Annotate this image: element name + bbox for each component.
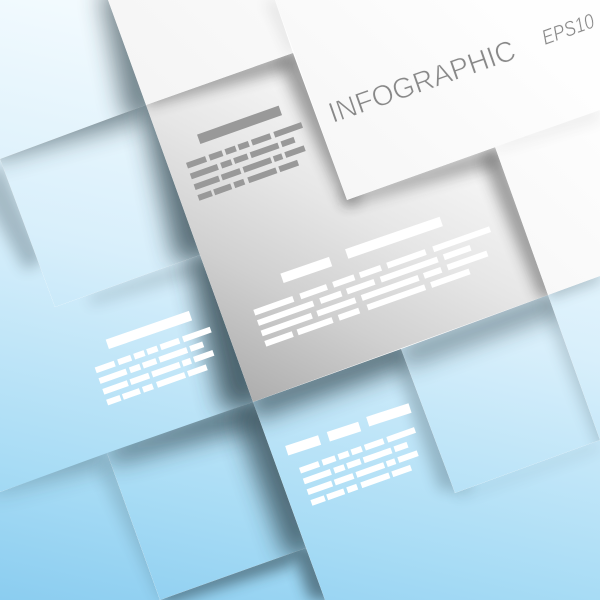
panel: white tile right (495, 105, 600, 295)
panel: blue tile top left (0, 0, 160, 159)
panel: grey stepped panel (146, 45, 560, 402)
heading bar: grey panel (197, 106, 282, 144)
heading bar: left blue block (106, 311, 192, 349)
panel: blue tile with lower text (245, 330, 600, 600)
panel: blue tile bottom centre (107, 402, 306, 600)
panel: blue tile far right (548, 270, 600, 440)
heading bars: lower blue block (285, 403, 412, 455)
heading bars: large white block (280, 217, 443, 283)
panel: blue tile bottom strip (160, 548, 325, 600)
text block: grey panel lines (186, 122, 314, 201)
panel: blue tile with left text (0, 159, 270, 492)
panel: blue tile right (395, 290, 600, 493)
panel: white tile top centre (108, 0, 300, 105)
panel: blue tile bottom left (0, 453, 160, 600)
title: INFOGRAPHIC: INFOGRAPHIC (324, 35, 520, 130)
panel: blue tile middle left (0, 105, 200, 307)
text block: left blue lines (95, 327, 223, 405)
panel: white title tile (334, 147, 495, 200)
text block: lower blue lines (299, 427, 427, 506)
text block: large white lines (253, 226, 502, 347)
